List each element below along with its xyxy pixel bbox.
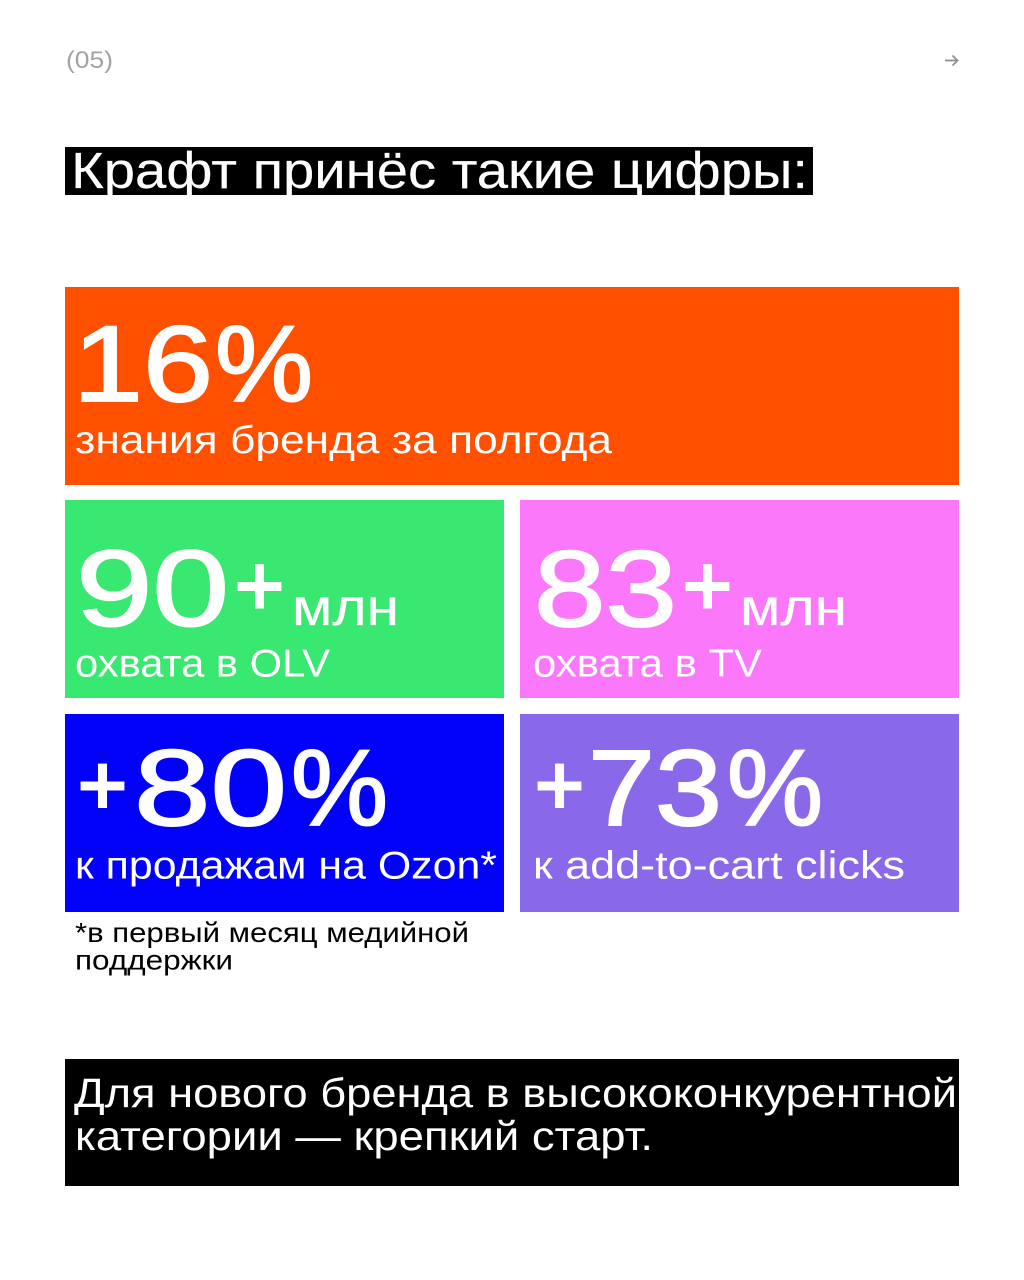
panel: Ozon sales: + xyxy=(78,738,127,832)
panel: TV reach: 83 xyxy=(534,528,677,649)
panel: add-to-cart clicks: + xyxy=(535,738,584,832)
panel: TV reach: охвата в TV xyxy=(533,642,762,686)
panel: Ozon sales: % xyxy=(291,727,388,848)
panel: Ozon sales xyxy=(65,714,504,912)
footnote: поддержки xyxy=(75,944,233,976)
panel: OLV reach xyxy=(65,500,504,698)
panel: add-to-cart clicks: % xyxy=(727,727,823,848)
panel: TV reach xyxy=(520,500,959,698)
panel: Ozon sales: 80 xyxy=(134,727,287,848)
title: Крафт принёс такие цифры: xyxy=(71,142,808,199)
panel: Ozon sales: к продажам на Ozon* xyxy=(75,844,497,888)
icon: next arrow xyxy=(945,56,958,66)
panel: brand awareness: % xyxy=(215,303,313,424)
panel: add-to-cart clicks xyxy=(520,714,959,912)
panel: add-to-cart clicks: к add-to-cart clicks xyxy=(533,844,905,888)
panel: brand awareness: знания бренда за полгода xyxy=(75,419,612,462)
footnote: *в первый месяц медийной xyxy=(75,917,469,948)
panel: add-to-cart clicks: 73 xyxy=(588,727,722,848)
page number: (05) xyxy=(66,47,113,74)
conclusion banner: Для нового бренда в высококонкурентной xyxy=(74,1070,957,1116)
panel: brand awareness xyxy=(65,287,959,485)
panel: OLV reach: + xyxy=(235,538,284,632)
panel: OLV reach: 90 xyxy=(76,528,229,648)
panel: TV reach: млн xyxy=(740,579,847,637)
footnote xyxy=(75,917,469,976)
conclusion banner: категории — крепкий старт. xyxy=(75,1113,653,1159)
conclusion banner xyxy=(65,1059,959,1186)
panel: TV reach: + xyxy=(683,538,732,632)
panel: OLV reach: млн xyxy=(292,579,399,637)
panel: brand awareness: 16 xyxy=(73,303,213,424)
panel: OLV reach: охвата в OLV xyxy=(75,642,330,686)
